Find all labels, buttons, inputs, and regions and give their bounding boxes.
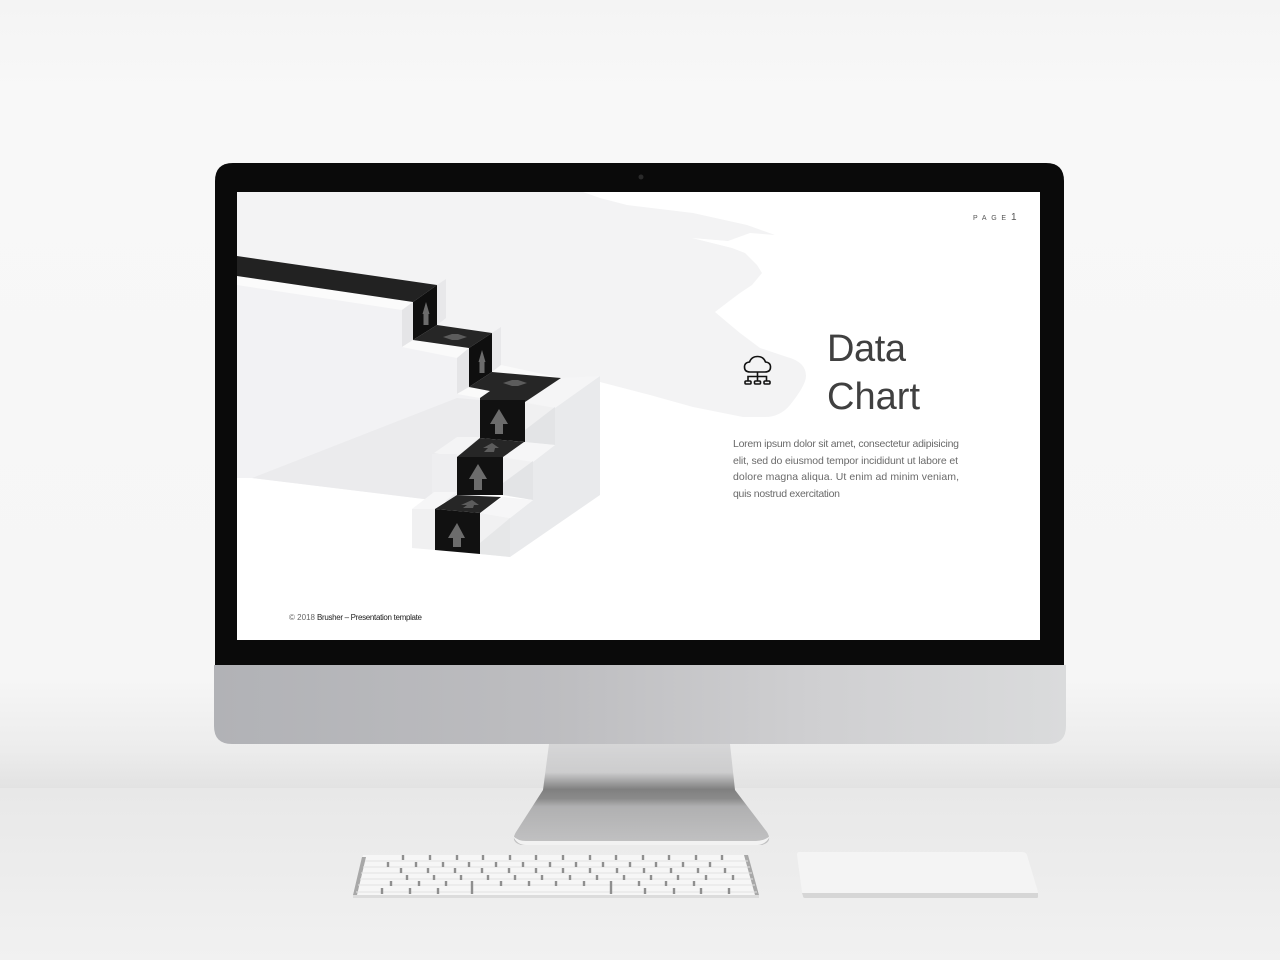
monitor chin [214,665,1066,744]
slide screen [237,192,1040,640]
trackpad [797,852,1038,898]
icon: cloud network [744,356,770,384]
page number: 1 [1011,212,1017,223]
key gaps [382,855,733,894]
footer copyright: © 2018 [289,613,316,622]
black carpet [237,256,561,554]
upper wall and shadow [237,283,480,500]
page number [973,212,1017,223]
stair treads and risers, left [434,437,480,457]
brush stroke background [237,192,806,478]
body text: quis nostrud exercitation [733,488,840,500]
staircase illustration [237,256,600,557]
monitor stand [513,744,770,845]
monitor bezel [215,163,1064,665]
key row lines [356,861,757,892]
title: Chart [827,376,920,418]
title: Data [827,328,907,370]
title [827,328,920,418]
keyboard [353,855,759,898]
body text: Lorem ipsum dolor sit amet, consectetur adipisicing [733,438,959,450]
desk surface [0,788,1280,960]
upper steps [402,302,413,347]
white ledge under top band [237,276,413,310]
body text: dolore magna aliqua. Ut enim ad minim veniam, [733,471,959,483]
camera [638,174,644,180]
footer copyright: Brusher – Presentation template [317,613,423,622]
stair block side face [510,376,600,557]
stair treads and risers, right [525,376,600,408]
body text: elit, sed do eiusmod tempor incididunt ut labore et [733,455,958,467]
body text [733,438,959,500]
arrows on stairs [422,302,527,547]
page number: PAGE [973,215,1006,222]
